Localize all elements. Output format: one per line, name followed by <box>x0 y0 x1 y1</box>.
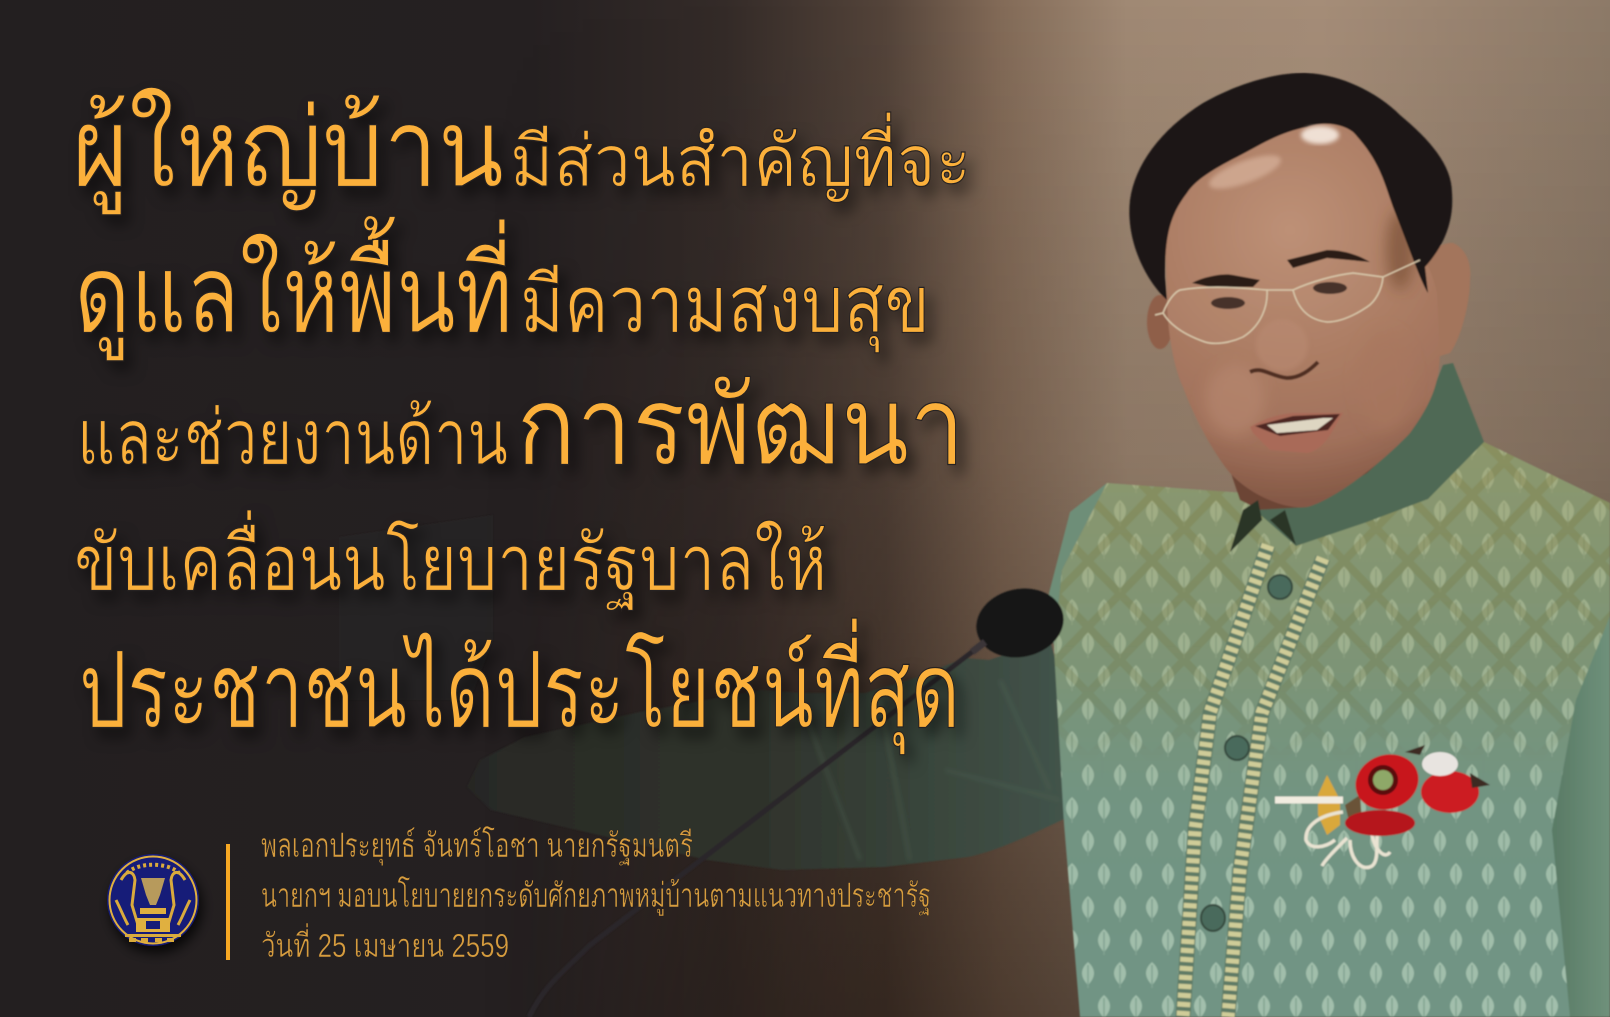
caption: topic: นายกฯ มอบนโยบายยกระดับศักยภาพหมู่บ้านตามแนวทางประชารัฐ <box>261 876 931 916</box>
caption <box>261 826 931 964</box>
vest <box>1049 441 1610 1017</box>
divider bar <box>226 844 230 960</box>
caption: name: พลเอกประยุทธ์ จันทร์โอชา นายกรัฐมนตรี <box>261 826 693 866</box>
collar <box>1255 363 1484 546</box>
caption: date: วันที่ 25 เมษายน 2559 <box>261 923 509 964</box>
microphone <box>970 581 1070 665</box>
collar shadow <box>1230 500 1296 552</box>
line 3: และช่วยงานด้าน <box>77 395 508 481</box>
buttons <box>1201 575 1292 931</box>
photo: speaker at microphone <box>469 72 1610 1017</box>
background <box>610 0 1610 1017</box>
line 1: ผู้ใหญ่บ้าน <box>72 87 504 215</box>
microphone stand <box>529 642 985 1017</box>
hair <box>1129 73 1452 300</box>
left ear <box>1147 295 1173 349</box>
line 2: ดูแลให้พื้นที่ <box>74 215 513 361</box>
headline <box>72 87 971 755</box>
line 1: มีส่วนสำคัญที่จะ <box>510 112 971 202</box>
line 4: ขับเคลื่อนนโยบายรัฐบาลให้ <box>74 510 827 610</box>
arm sleeve <box>467 640 1066 870</box>
line 1 <box>72 87 971 215</box>
neck <box>1230 365 1450 530</box>
line 5: ประชาชนได้ประโยชน์ที่สุด <box>79 618 960 755</box>
mouth <box>1250 413 1343 453</box>
face shading <box>1205 210 1414 435</box>
eyebrows <box>1192 250 1370 287</box>
forehead highlight <box>1206 126 1339 195</box>
line 3 <box>77 365 965 488</box>
line 3: การพัฒนา <box>516 365 965 488</box>
gold placket bands <box>1183 545 1323 1017</box>
faded paper in hand <box>339 515 493 700</box>
nose <box>1250 319 1318 378</box>
line 2 <box>74 215 930 361</box>
glasses <box>1155 260 1420 343</box>
line 2: มีความสงบสุข <box>520 260 930 353</box>
right ear <box>1420 243 1470 357</box>
icon: government seal <box>107 854 199 946</box>
pocket flower <box>1275 745 1490 868</box>
eyes <box>1211 282 1347 309</box>
face <box>1165 115 1440 507</box>
